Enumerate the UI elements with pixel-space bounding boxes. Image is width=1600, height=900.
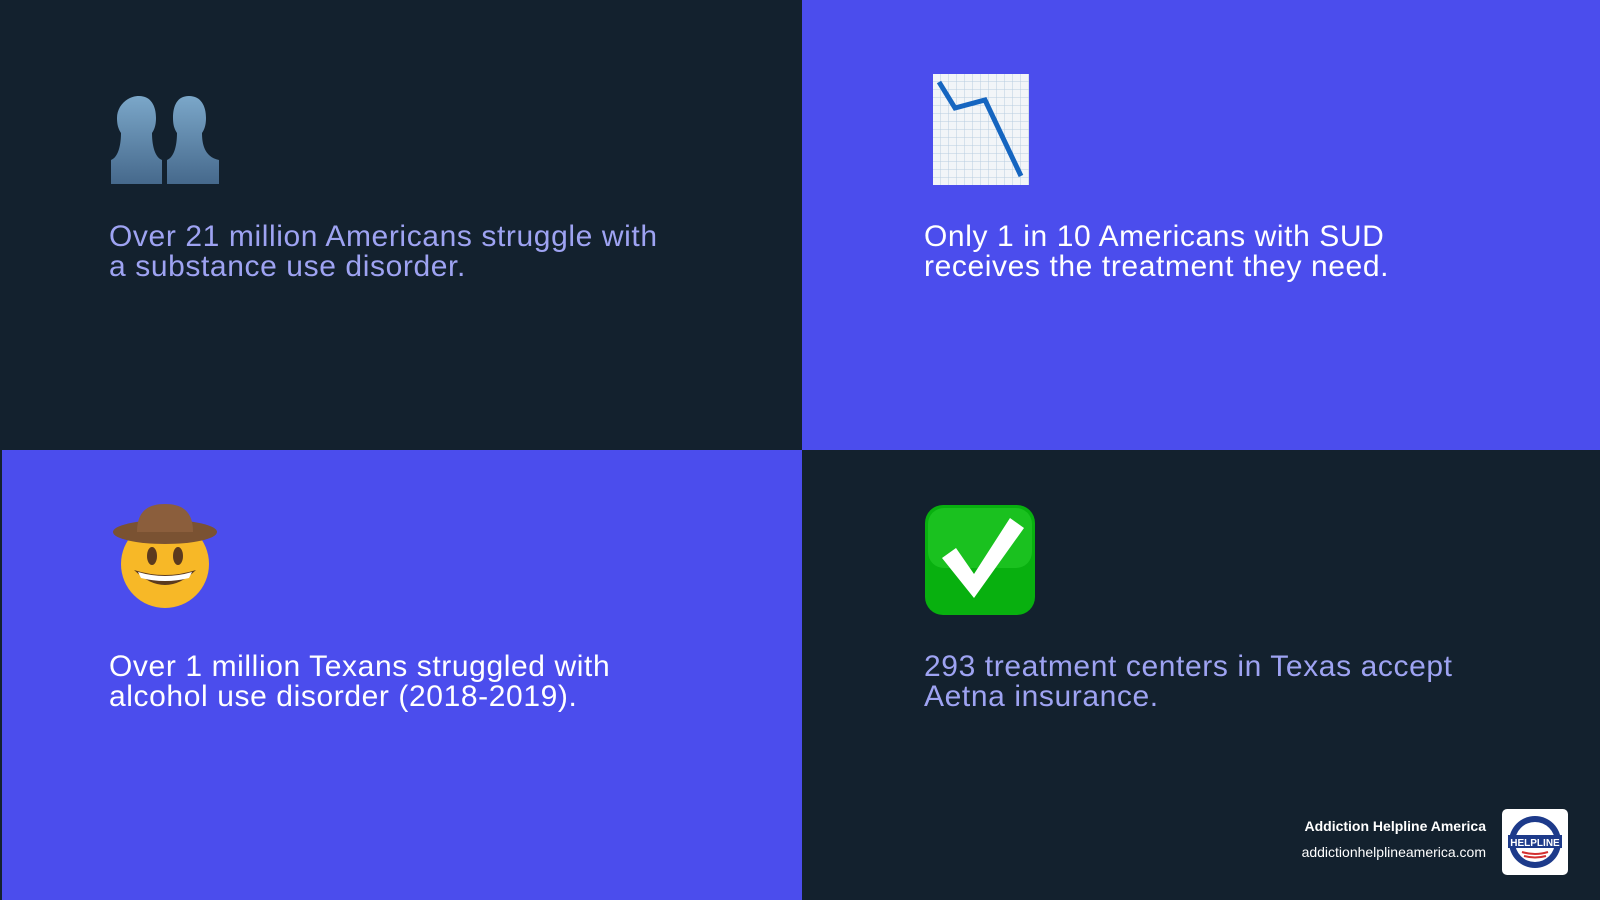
brand url: addictionhelplineamerica.com bbox=[1302, 844, 1486, 860]
text: stat 4: Aetna insurance. bbox=[924, 680, 1159, 713]
icon: declining chart bbox=[933, 74, 1029, 185]
logo bbox=[1502, 809, 1568, 875]
panel: top-left bbox=[2, 0, 802, 450]
panel: top-right bbox=[802, 0, 1600, 450]
text: stat 2: receives the treatment they need. bbox=[924, 250, 1389, 283]
text: stat 4 bbox=[924, 650, 1453, 713]
logo: HELPLINE bbox=[1510, 838, 1560, 849]
icon: two people silhouettes bbox=[111, 96, 219, 184]
text: stat 4: 293 treatment centers in Texas accept bbox=[924, 650, 1453, 683]
text: stat 3: alcohol use disorder (2018-2019). bbox=[109, 680, 577, 713]
text: stat 2 bbox=[924, 220, 1389, 283]
panel: bottom-right bbox=[802, 450, 1600, 900]
text: stat 3: Over 1 million Texans struggled with bbox=[109, 650, 610, 683]
text: stat 1 bbox=[109, 220, 658, 283]
icon: cowboy smiley bbox=[113, 504, 217, 608]
branding bbox=[1302, 809, 1568, 875]
text: stat 2: Only 1 in 10 Americans with SUD bbox=[924, 220, 1384, 253]
text: stat 1: Over 21 million Americans struggle with bbox=[109, 220, 658, 253]
icon: check mark bbox=[925, 505, 1035, 615]
text: stat 1: a substance use disorder. bbox=[109, 250, 466, 283]
panel: bottom-left bbox=[2, 450, 802, 900]
brand name: Addiction Helpline America bbox=[1304, 818, 1486, 834]
text: stat 3 bbox=[109, 650, 610, 713]
